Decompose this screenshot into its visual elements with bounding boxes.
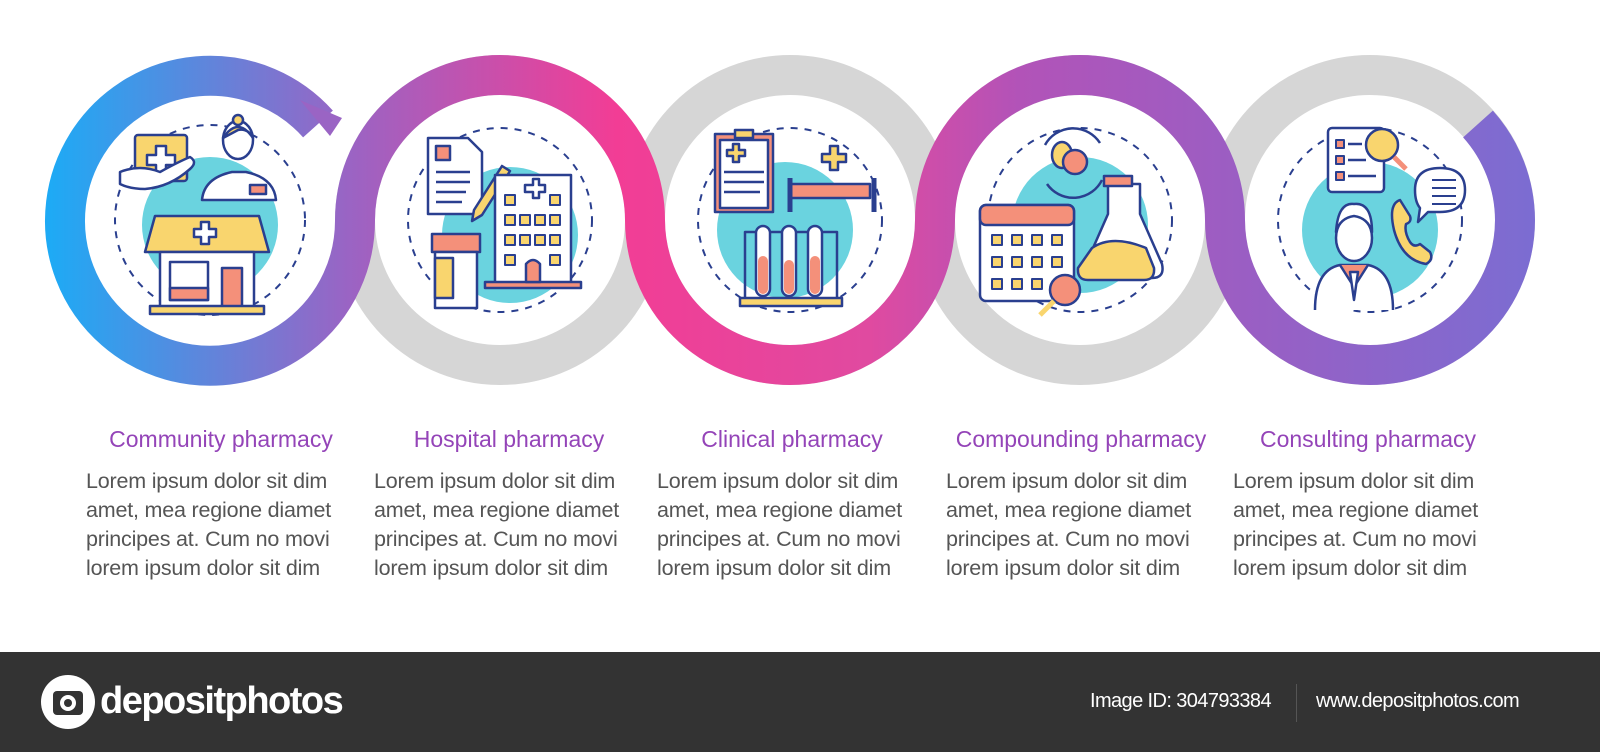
text column: Hospital pharmacy: Hospital pharmacy (414, 426, 604, 452)
text column: Consulting pharmacy: principes at. Cum no movi (1233, 527, 1477, 551)
text column: Compounding pharmacy: amet, mea regione diamet (946, 498, 1191, 522)
text column: Hospital pharmacy: principes at. Cum no movi (374, 527, 618, 551)
logo icon: camera (41, 675, 95, 729)
website: www.depositphotos.com (1316, 690, 1519, 712)
icon 1: community pharmacy (115, 115, 305, 315)
text column: Consulting pharmacy: amet, mea regione diamet (1233, 498, 1478, 522)
icon 5: consulting pharmacy (1278, 128, 1465, 312)
logo text: depositphotos (100, 680, 342, 722)
text column: Compounding pharmacy (946, 426, 1206, 580)
text column: Consulting pharmacy: Consulting pharmacy (1260, 426, 1476, 452)
text column: Compounding pharmacy: lorem ipsum dolor sit dim (946, 556, 1180, 580)
text column: Hospital pharmacy: amet, mea regione diamet (374, 498, 619, 522)
text column: Compounding pharmacy: Compounding pharmacy (956, 426, 1206, 452)
text column: Clinical pharmacy: amet, mea regione diamet (657, 498, 902, 522)
text column: Compounding pharmacy: principes at. Cum no movi (946, 527, 1190, 551)
text column: Clinical pharmacy (657, 426, 902, 580)
text column: Consulting pharmacy: Lorem ipsum dolor sit dim (1233, 469, 1474, 493)
text column: Clinical pharmacy: Clinical pharmacy (701, 426, 883, 452)
icon 2: hospital pharmacy (408, 128, 592, 312)
text column: Community pharmacy: Lorem ipsum dolor sit dim (86, 469, 327, 493)
footer bar (0, 652, 1600, 752)
icon 4: compounding pharmacy (980, 128, 1172, 315)
text column: Community pharmacy: lorem ipsum dolor sit dim (86, 556, 320, 580)
text column: Consulting pharmacy (1233, 426, 1478, 580)
text column: Community pharmacy (86, 426, 333, 580)
text column: Clinical pharmacy: Lorem ipsum dolor sit dim (657, 469, 898, 493)
text column: Clinical pharmacy: principes at. Cum no movi (657, 527, 901, 551)
gray ring track (355, 75, 1515, 365)
text column: Consulting pharmacy: lorem ipsum dolor sit dim (1233, 556, 1467, 580)
icon 3: clinical pharmacy (698, 128, 882, 312)
text column: Clinical pharmacy: lorem ipsum dolor sit dim (657, 556, 891, 580)
text column: Compounding pharmacy: Lorem ipsum dolor sit dim (946, 469, 1187, 493)
text column: Hospital pharmacy: lorem ipsum dolor sit dim (374, 556, 608, 580)
colored serpentine arrow band (65, 75, 1515, 366)
text column: Community pharmacy: principes at. Cum no movi (86, 527, 330, 551)
text column: Community pharmacy: Community pharmacy (109, 426, 333, 452)
diagram: serpentine rings with icons (44, 55, 1535, 386)
text column: Community pharmacy: amet, mea regione diamet (86, 498, 331, 522)
text column: Hospital pharmacy: Lorem ipsum dolor sit dim (374, 469, 615, 493)
text column: Hospital pharmacy (374, 426, 620, 580)
image id: Image ID: 304793384 (1090, 690, 1271, 712)
